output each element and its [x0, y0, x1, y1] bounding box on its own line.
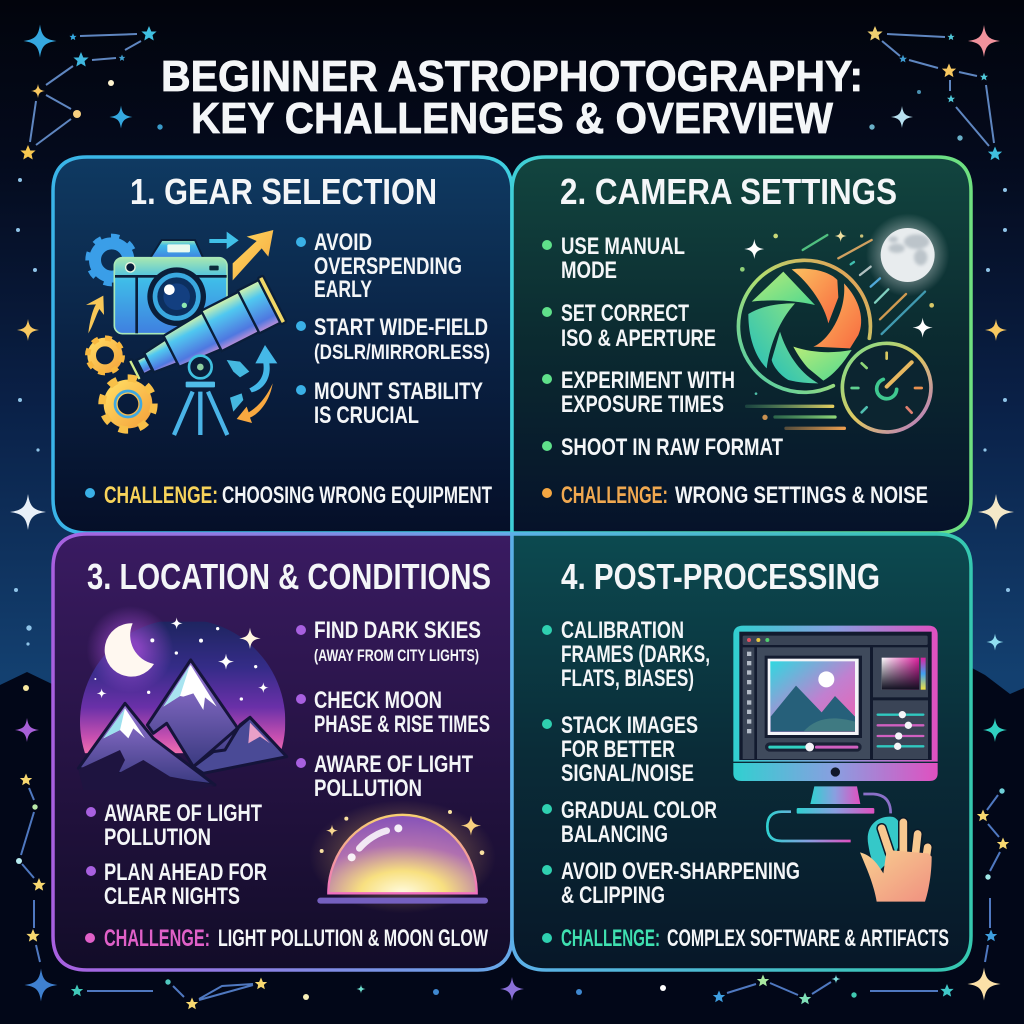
bottom-centre star	[500, 977, 524, 1001]
bullet: start wide-field	[296, 314, 490, 364]
constellations: top-right	[867, 25, 1002, 160]
bullet: avoid overspending	[296, 229, 462, 303]
bullet: calibration frames: FRAMES (DARKS,	[561, 641, 710, 668]
panel: location and conditions	[53, 534, 512, 970]
bullet: start wide-field: (DSLR/MIRRORLESS)	[314, 341, 490, 364]
bullet: light pollution repeated	[86, 800, 262, 851]
bullet: moon phase: CHECK MOON	[314, 687, 442, 714]
bullet: manual mode	[542, 233, 685, 284]
constellation: bottom-left	[71, 978, 439, 1009]
panel: post-processing	[512, 534, 971, 970]
bullet: moon phase: PHASE & RISE TIMES	[314, 711, 490, 738]
bullet: mount stability: IS CRUCIAL	[314, 402, 419, 429]
side stars: left and right	[10, 178, 1014, 650]
bullet: colour balancing	[542, 797, 717, 848]
challenge: location: LIGHT POLLUTION & MOON GLOW	[218, 925, 488, 952]
challenge: settings	[542, 482, 928, 509]
bullet: over-sharpening: & CLIPPING	[561, 882, 665, 909]
icon: monitor, mouse and hand	[733, 626, 938, 902]
challenge: location: CHALLENGE:	[104, 925, 210, 952]
bullet: exposure times: EXPERIMENT WITH	[561, 367, 735, 394]
challenge: settings: WRONG SETTINGS & NOISE	[675, 482, 928, 509]
challenge: post-processing: CHALLENGE:	[561, 925, 660, 952]
bullet: colour balancing: GRADUAL COLOR	[561, 797, 717, 824]
bullet: calibration frames: CALIBRATION	[561, 617, 684, 644]
bullet: dark skies: (AWAY FROM CITY LIGHTS)	[314, 646, 479, 665]
bullet: calibration frames	[542, 617, 710, 692]
bullet: avoid overspending: EARLY	[314, 276, 372, 303]
panel: camera settings	[512, 157, 971, 533]
bullet: exposure times	[542, 367, 735, 418]
title	[161, 52, 863, 143]
panel: gear selection	[53, 157, 512, 533]
title: KEY CHALLENGES & OVERVIEW	[191, 94, 833, 143]
heading: camera settings: 2. CAMERA SETTINGS	[560, 171, 897, 212]
bullet: over-sharpening: AVOID OVER-SHARPENING	[561, 858, 800, 885]
constellations: top-left	[20, 24, 163, 159]
bullet: stack images	[542, 712, 698, 787]
bullet: stack images: STACK IMAGES	[561, 712, 698, 739]
bullet: avoid overspending: AVOID	[314, 229, 372, 256]
bullet: iso and aperture: SET CORRECT	[561, 300, 689, 327]
bullet: over-sharpening	[542, 858, 800, 909]
bullet: moon phase	[296, 687, 490, 738]
icon: light dome	[309, 800, 496, 913]
bullet: clear nights	[86, 859, 267, 910]
bullet: manual mode: USE MANUAL	[561, 233, 685, 260]
bullet: start wide-field: START WIDE-FIELD	[314, 314, 488, 341]
bullet: raw format: SHOOT IN RAW FORMAT	[561, 434, 783, 461]
bullet: light pollution: POLLUTION	[314, 775, 422, 802]
challenge: settings: CHALLENGE:	[561, 482, 668, 509]
bullet: stack images: SIGNAL/NOISE	[561, 760, 694, 787]
icon: aperture, moon and gauge	[738, 213, 949, 432]
bullet: mount stability: MOUNT STABILITY	[314, 378, 483, 405]
bullet: clear nights: CLEAR NIGHTS	[104, 883, 240, 910]
icon: mountains and moon	[78, 606, 287, 790]
challenge: gear: CHOOSING WRONG EQUIPMENT	[222, 482, 492, 509]
heading: gear selection: 1. GEAR SELECTION	[130, 171, 437, 212]
bullet: dark skies: FIND DARK SKIES	[314, 617, 481, 644]
challenge: gear: CHALLENGE:	[104, 482, 218, 509]
bullet: iso and aperture	[542, 300, 716, 352]
heading: location and conditions: 3. LOCATION & CONDITIONS	[87, 556, 491, 597]
bullet: colour balancing: BALANCING	[561, 821, 668, 848]
title: BEGINNER ASTROPHOTOGRAPHY:	[161, 52, 863, 101]
bullet: iso and aperture: ISO & APERTURE	[561, 325, 716, 352]
constellation: bottom-right	[576, 974, 954, 1004]
icon: camera and telescope	[86, 230, 287, 435]
background mountains silhouette	[0, 668, 1024, 1024]
bullet: stack images: FOR BETTER	[561, 736, 675, 763]
bullet: light pollution repeated: POLLUTION	[104, 824, 211, 851]
bullet: manual mode: MODE	[561, 257, 617, 284]
constellation: lower-left	[15, 685, 58, 1002]
challenge: post-processing	[542, 925, 949, 952]
bullet: exposure times: EXPOSURE TIMES	[561, 391, 724, 418]
bullet: avoid overspending: OVERSPENDING	[314, 253, 462, 280]
bullet: clear nights: PLAN AHEAD FOR	[104, 859, 267, 886]
challenge: location	[85, 925, 488, 952]
bullet: light pollution repeated: AWARE OF LIGHT	[104, 800, 262, 827]
bullet: calibration frames: FLATS, BIASES)	[561, 665, 694, 692]
bullet: light pollution: AWARE OF LIGHT	[314, 751, 473, 778]
bullet: mount stability	[296, 378, 483, 429]
constellation: lower-right	[968, 718, 1009, 1000]
bullet: dark skies	[296, 617, 481, 665]
challenge: gear	[85, 482, 492, 509]
heading: post-processing: 4. POST-PROCESSING	[561, 556, 880, 597]
bullet: light pollution	[296, 751, 473, 802]
